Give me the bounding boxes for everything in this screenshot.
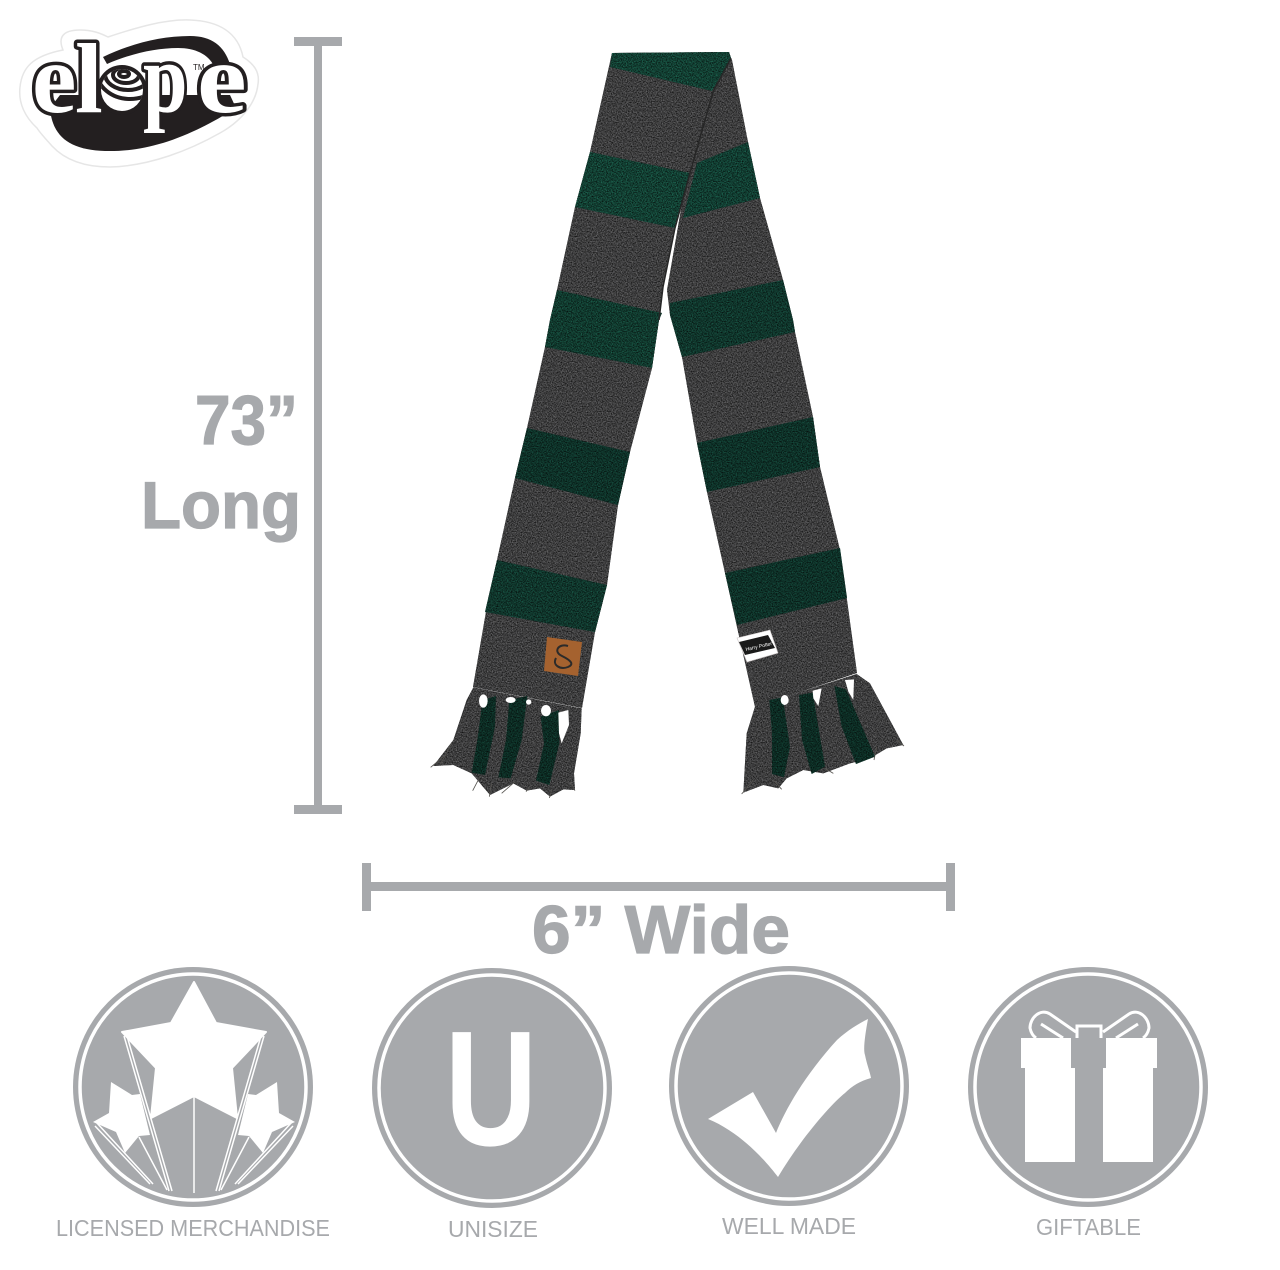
scarf left leg (473, 52, 731, 708)
logo: elope (20, 20, 258, 167)
label wordmark: Harry Potter (745, 641, 773, 653)
left fringe (433, 687, 582, 797)
leather patch with snake (544, 637, 582, 676)
logo letter p: p (143, 23, 187, 134)
badge circle (73, 967, 313, 1207)
right fringe (743, 674, 903, 793)
scarf right leg (667, 53, 857, 707)
logo letter e: e (32, 23, 76, 134)
icon: stars (93, 982, 295, 1193)
caption: LICENSED MERCHANDISE (56, 1215, 330, 1241)
badge ring (676, 973, 902, 1199)
badge circle (372, 968, 612, 1208)
logo swirl ball (100, 65, 146, 111)
icon: gift box (1021, 1012, 1157, 1162)
caption: UNISIZE (448, 1216, 538, 1242)
logo black swoosh (103, 36, 230, 66)
sewn label (737, 630, 778, 662)
fringe gaps (479, 679, 854, 743)
feature: giftable (968, 967, 1208, 1240)
badge ring (379, 975, 605, 1201)
badge circle (968, 967, 1208, 1207)
vertical dimension bar (294, 37, 342, 814)
caption: WELL MADE (722, 1213, 856, 1239)
badge ring (80, 974, 306, 1200)
caption: GIFTABLE (1036, 1214, 1141, 1240)
scarf fold shadow (659, 58, 731, 320)
logo letter e: e (197, 23, 247, 134)
logo trademark: TM (193, 63, 205, 72)
icon: check mark (708, 1019, 871, 1177)
length word: Long (141, 468, 301, 542)
fringe wisps (431, 740, 904, 798)
horizontal dimension bar (362, 863, 955, 911)
logo letter l: l (75, 23, 103, 134)
width label: 6” Wide (532, 892, 790, 968)
badge ring (975, 974, 1201, 1200)
feature: well made (669, 966, 909, 1239)
logo sticker outline (20, 20, 258, 167)
feature: unisize (372, 968, 612, 1242)
badge circle (669, 966, 909, 1206)
logo black base (50, 95, 236, 151)
scarf photo (433, 52, 903, 797)
feature: licensed merchandise (56, 967, 330, 1241)
icon: letter U: U (445, 998, 537, 1181)
length label (141, 381, 301, 542)
length value: 73” (195, 381, 298, 459)
